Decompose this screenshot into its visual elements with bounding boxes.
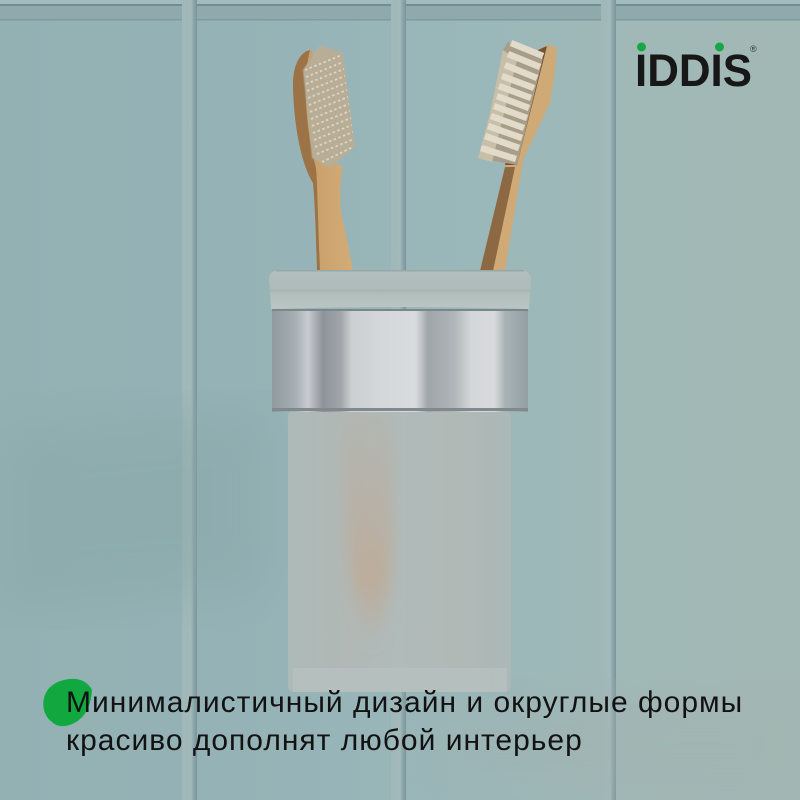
glass cup rim xyxy=(269,270,531,309)
metal holder ring xyxy=(272,309,528,412)
logo: IDDIS: ® xyxy=(750,44,757,54)
frosted glass cup xyxy=(288,410,511,692)
caption text: красиво дополнят любой интерьер xyxy=(66,724,583,757)
green circle accent xyxy=(43,679,92,726)
logo: IDDIS: IDDIS xyxy=(635,45,752,96)
caption text xyxy=(66,686,743,757)
toothbrush: right xyxy=(478,42,557,271)
caption text: Минималистичный дизайн и округлые формы xyxy=(66,686,743,719)
toothbrush: left xyxy=(293,45,355,271)
